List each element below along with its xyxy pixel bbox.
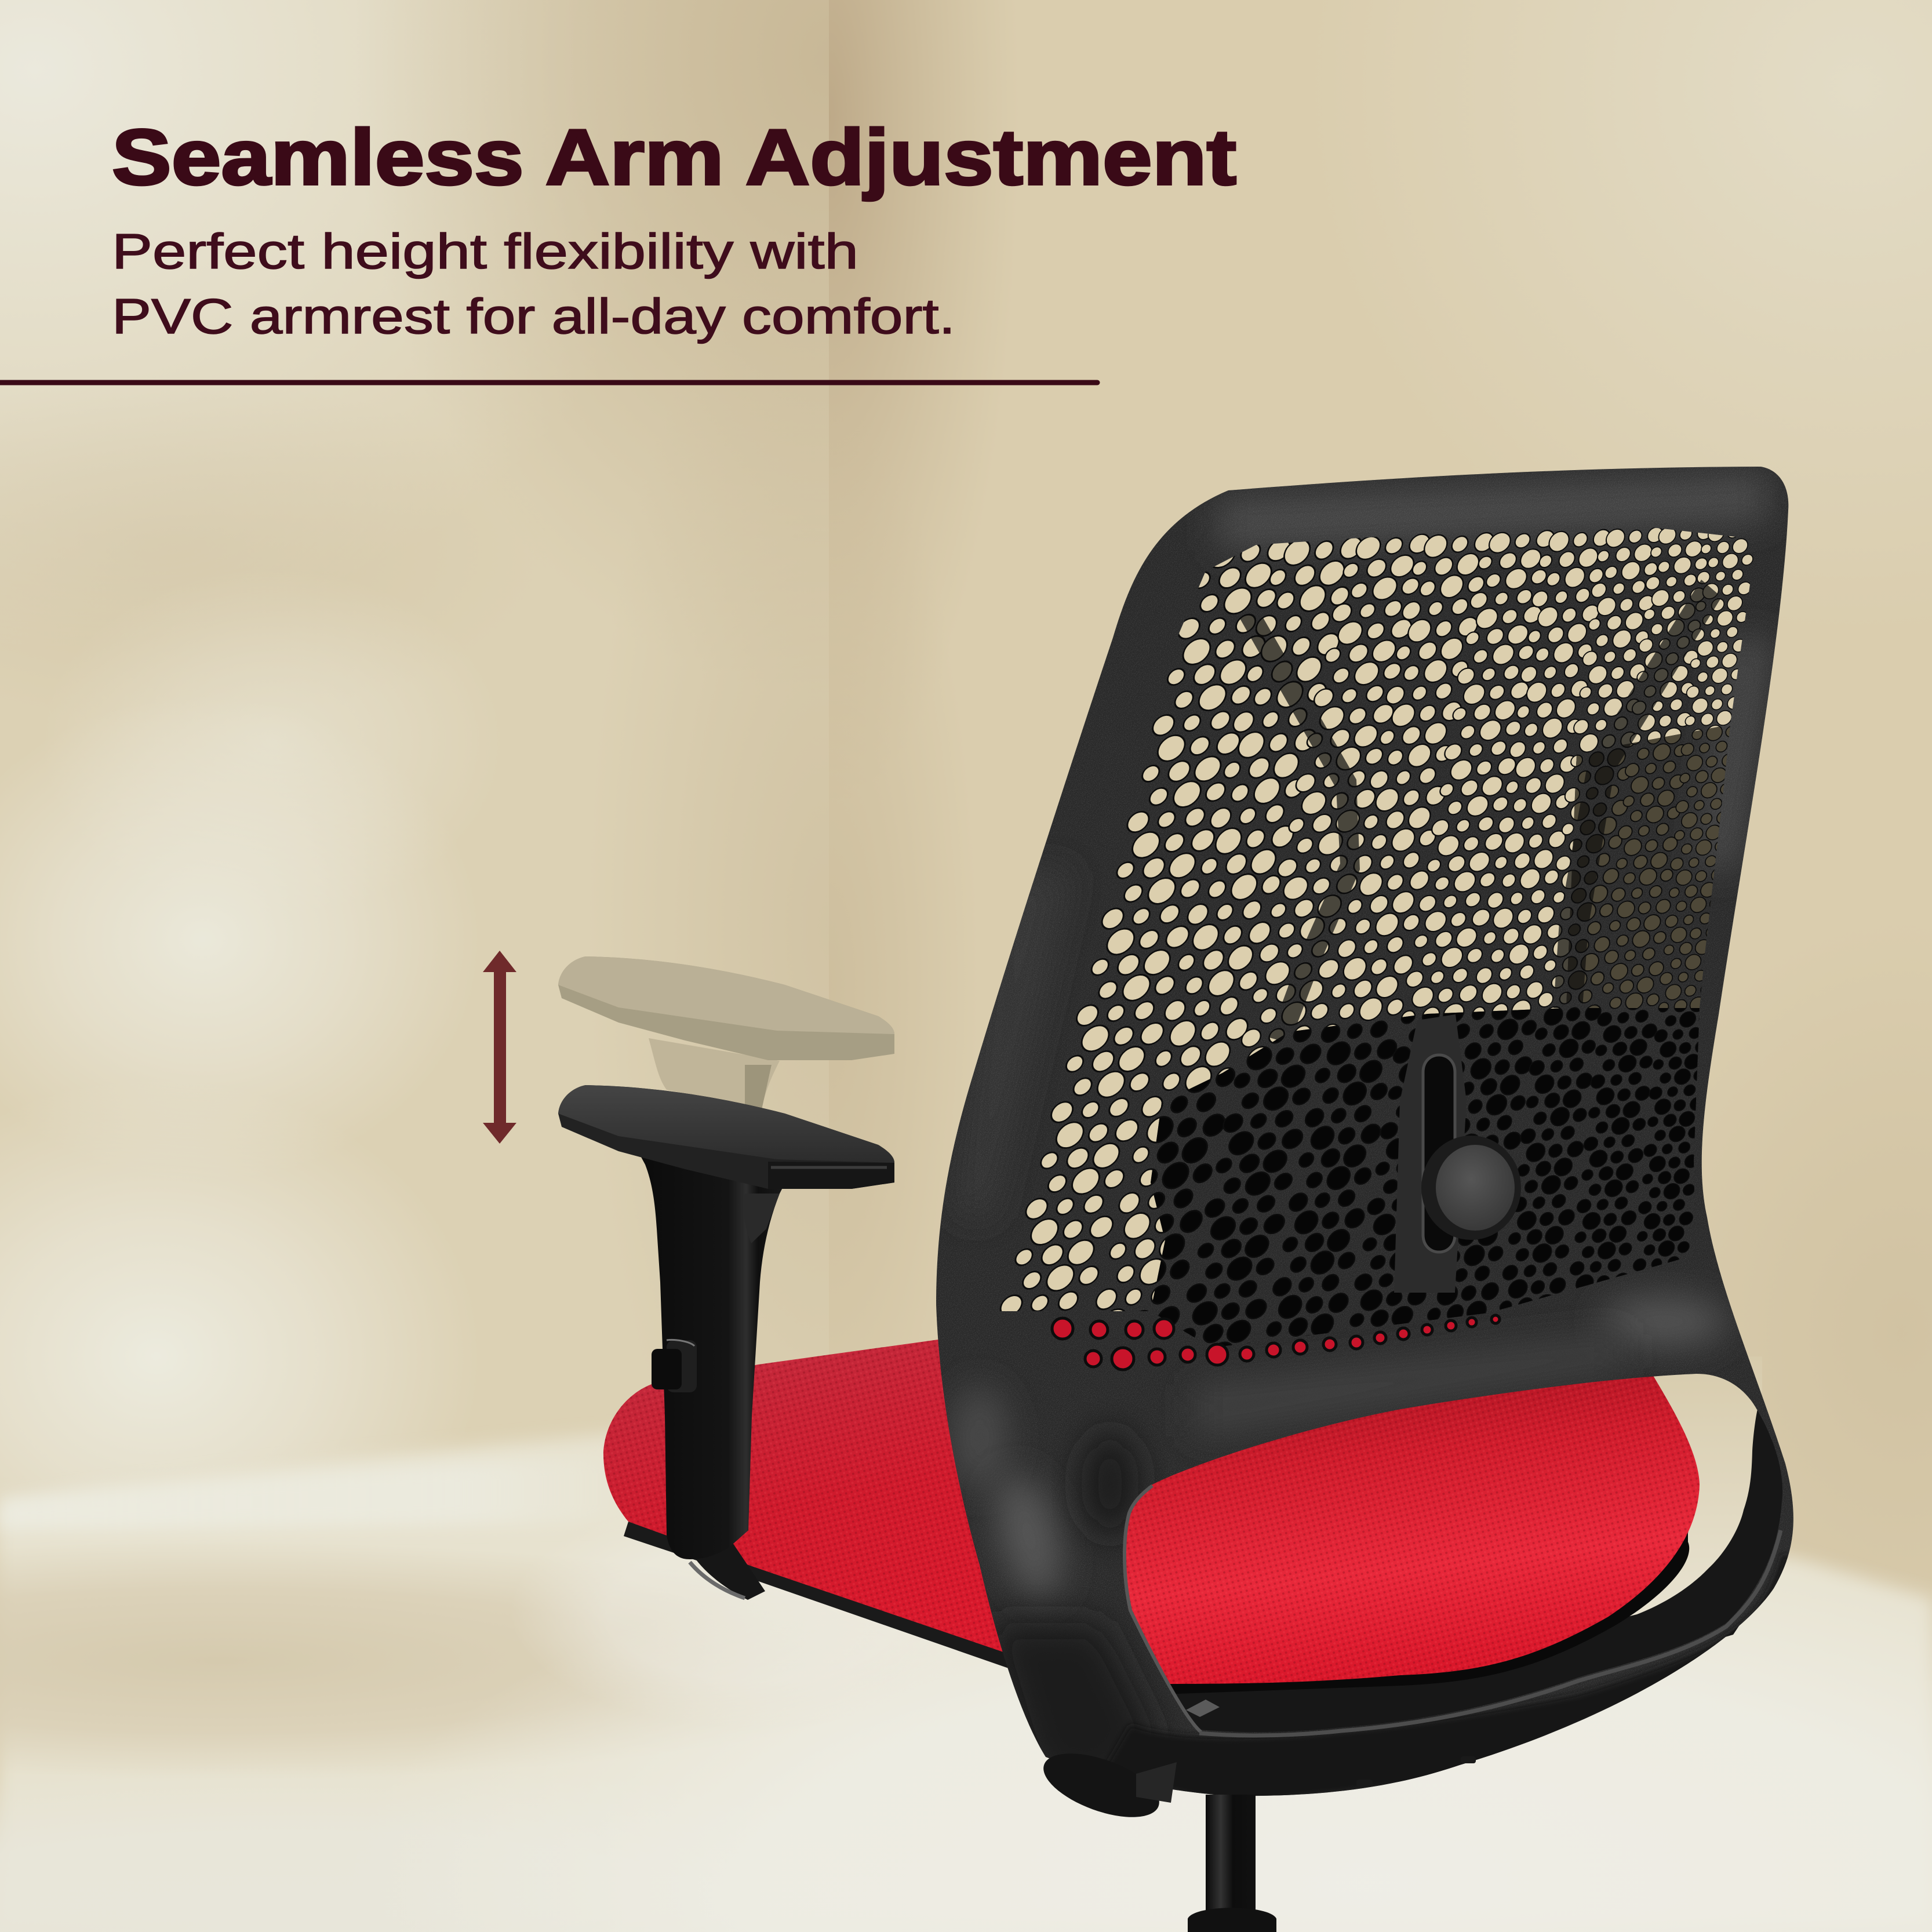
title: Seamless Arm Adjustment [112, 113, 1236, 201]
lower body under front lip [1101, 1553, 1803, 1806]
subtitle text block [112, 224, 955, 344]
left wall tones [0, 0, 1304, 1635]
subtitle text block: PVC armrest for all-day comfort. [112, 289, 955, 344]
front lip highlight [1199, 1530, 1781, 1735]
floor and wall visible through opening [1572, 1356, 1762, 1631]
opening inner rim highlight [1125, 1486, 1201, 1732]
red seat visible through lower holes [1052, 1315, 1500, 1370]
perforated mesh panel [871, 523, 1757, 1800]
seat pan rim [1130, 1530, 1689, 1695]
shadowed holes: right zone [871, 523, 1757, 1800]
seat cushion seen through the frame opening [1101, 1356, 1788, 1739]
plastic speckle texture [927, 458, 1797, 1803]
ribs behind mesh seen only inside holes [871, 523, 1757, 1800]
ghost armrest: raised position [558, 956, 894, 1109]
divider rule under heading [0, 380, 1097, 385]
icon: up-down adjustment arrow [483, 951, 516, 1144]
seat cushion: left portion with pan [603, 1340, 1007, 1668]
red cushion [1101, 1359, 1700, 1684]
see-through holes in upper and left mesh [871, 523, 1757, 1800]
adjuster knob [1421, 1136, 1521, 1240]
chair base: tilt knob, screws and gas stem [1035, 1741, 1476, 1932]
armrest pad: solid position [558, 1085, 894, 1189]
chair back shell with frame opening [927, 458, 1803, 1806]
armrest release button [652, 1340, 697, 1392]
shell shading [927, 458, 1803, 1806]
floor [0, 1420, 1932, 1932]
rear frame band [1119, 1356, 1788, 1739]
lumbar adjuster: spine, slot and knob [1394, 1014, 1521, 1293]
right wall tones [829, 0, 1932, 1596]
lower frame darkening [985, 1623, 1159, 1797]
dark holes: lumbar zone [871, 523, 1757, 1800]
mechanism spring below seat [1186, 1700, 1220, 1717]
armrest post and bracket [638, 1151, 788, 1600]
subtitle text block: Perfect height flexibility with [112, 224, 858, 279]
adjuster slot [1423, 1055, 1455, 1252]
